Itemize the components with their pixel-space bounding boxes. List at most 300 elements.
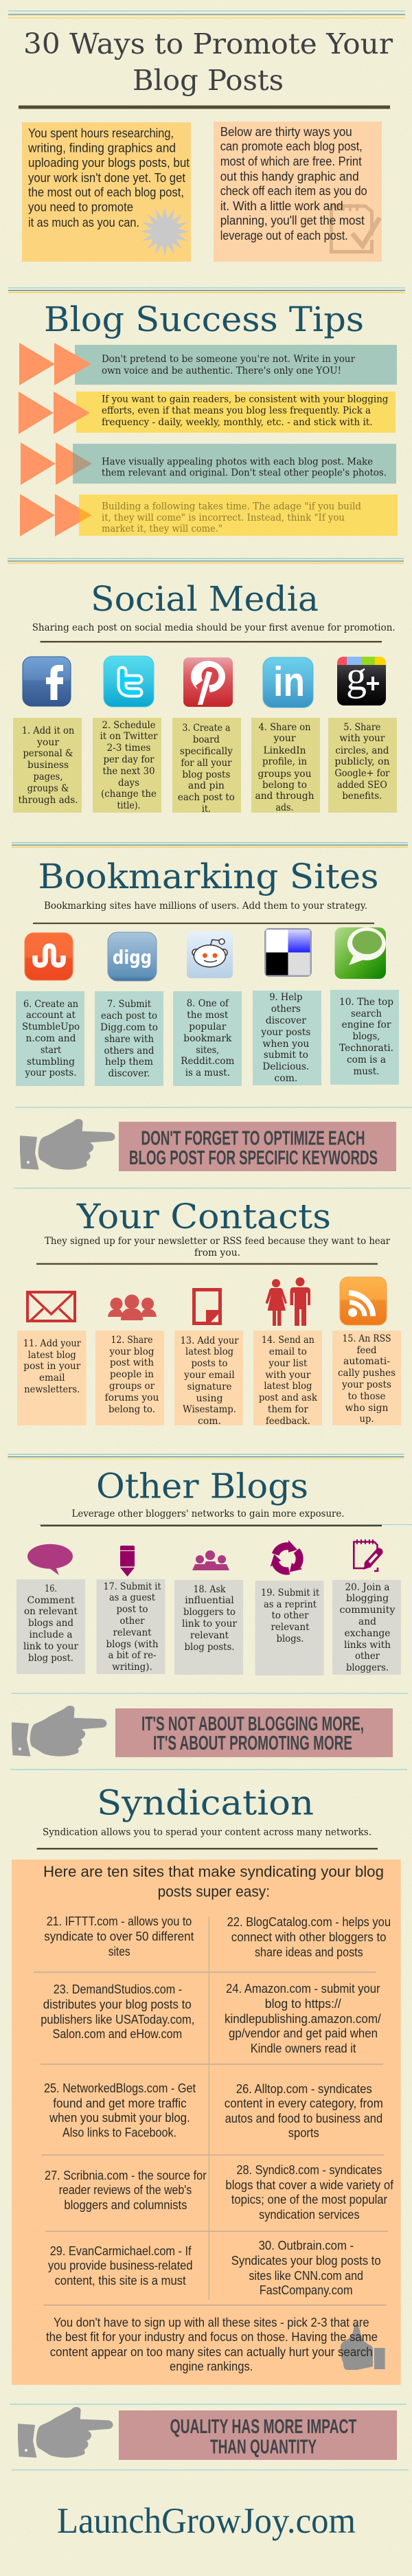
site 24 [225,1982,381,2055]
card: item 14: them for [268,1404,308,1415]
card: item 7: discover. [108,1068,150,1079]
card: item 7: others and [104,1046,154,1057]
icon: double arrow [19,392,90,434]
card: item 13: your email [183,1370,235,1381]
card: item 7: share with [104,1034,154,1045]
card: item 4: and through [255,791,314,802]
card: item 17: as a guest [109,1592,155,1603]
site 24: kindlepublishing.amazon.com/ [225,2012,381,2026]
panel heading: Here are ten sites that make syndicating your blog [43,1863,384,1880]
card: item 9: others [271,1004,301,1015]
card: item 1: business [27,760,69,771]
icon: linkedin [263,657,313,708]
site 28: topics; one of the most popular [231,2193,387,2206]
card: item 7: each post to [101,1010,157,1021]
site 22: connect with other bloggers to [231,1930,387,1944]
card: item 13: latest blog [185,1346,233,1357]
card: item 8: the most [187,1010,229,1021]
card: item 13: using [196,1393,223,1404]
site 24: Kindle owners read it [251,2042,356,2055]
site 23: distributes your blog posts to [43,1998,192,2011]
card: item 17: blogs (with [106,1639,158,1650]
site 24: gp/vendor and get paid when [229,2026,378,2040]
card: item 2: per day for [103,754,154,765]
card: item 2: title). [117,800,140,811]
card: item 12: belong to. [108,1404,155,1415]
card: item 2: 2-3 times [107,743,151,754]
panel: intro left [22,122,191,262]
card: item 7: 7. Submit [107,999,151,1010]
panel: tip 2: efforts, even if that means you blog less frequently. Pick a [102,405,371,416]
panel: intro left: your work isn't done yet. To get [28,171,185,185]
site 30: sites like CNN.com and [249,2269,363,2283]
site 29: you provide business-related [48,2259,192,2272]
panel: tip 1: own voice and be authentic. There's only one YOU! [102,365,341,376]
card: item 15 [332,1331,401,1425]
banner: quality over quantity: THAN QUANTITY [210,2437,317,2459]
site 23: 23. DemandStudios.com - [54,1982,182,1996]
card: item 11: email [39,1372,65,1383]
card: item 17: other [119,1616,145,1627]
icon: thumbs up [341,2324,385,2370]
site 29: content, this site is a must [55,2274,186,2287]
icon: speech bubble [27,1544,73,1575]
card: item 2: 2. Schedule [102,720,155,731]
panel: intro right: Below are thirty ways you [220,125,352,139]
card: item 14: your list [268,1358,308,1369]
card: item 4: belong to [262,780,307,791]
card: item 20: links with [344,1640,391,1651]
site 21: sites [108,1945,130,1958]
card: item 13: signature [187,1381,232,1392]
card: item 2: days [118,778,139,789]
site 25: Also links to Facebook. [62,2126,176,2140]
card: item 16: on relevant [24,1606,78,1617]
card: item 16: include a [29,1629,73,1640]
panel: intro left: the most out of each blog post, [28,185,184,199]
subtitle: social media: Sharing each post on social media should be your first avenue for promotion. [32,622,396,633]
card: item 15: automati- [343,1356,390,1367]
site 25: 25. NetworkedBlogs.com - Get [44,2081,196,2095]
panel: intro left: uploading your blogs posts, but [28,156,190,170]
icon: notepad check [331,204,380,251]
closing note: You don't have to sign up with all these sites - pick 2-3 that are [54,2316,369,2329]
icon: note and pencil [354,1539,379,1571]
heading: Your Contacts: Your Contacts [76,1197,331,1236]
card: item 6: account at [26,1010,76,1021]
card: item 3: and pin [188,780,225,791]
card: item 15: feed [357,1345,377,1356]
site 30: 30. Outbrain.com - [259,2239,354,2252]
panel: tip 4: it, they will come" is incorrect. Instead, think "If you [102,512,345,523]
card: item 3: board [193,734,220,745]
card: item 14: with your [265,1370,311,1381]
card: item 9: 9. Help [269,992,302,1003]
card: item 19: to other [272,1610,309,1621]
card: item 4: 4. Share on [258,722,310,733]
card: item 16: blogs and [28,1618,73,1629]
site 26: sports [288,2126,319,2140]
footer brand: LaunchGrowJoy.com [57,2501,356,2541]
card: item 6: n.com and [26,1033,76,1044]
card: item 1: through ads. [18,795,78,806]
site 22: share ideas and posts [255,1945,363,1959]
card: item 4: groups you [258,769,312,780]
subtitle: other blogs: Leverage other bloggers' networks to gain more exposure. [71,1509,345,1519]
heading: Bookmarking Sites: Bookmarking Sites [38,857,379,896]
card: item 19: as a reprint [264,1599,317,1610]
icon: group purple [192,1550,229,1570]
card: item 7: help them [105,1057,153,1067]
card: item 8 [173,991,242,1086]
site 22 [227,1915,391,1959]
card: item 19: blogs. [276,1634,304,1645]
panel: tip 1 [19,343,397,385]
card: item 13: Wisestamp. [183,1404,236,1415]
title [23,27,393,97]
card: item 14: post and ask [259,1392,317,1403]
card: item 9: submit to [264,1050,308,1061]
panel: syndication sites [12,1860,401,2385]
icon: document [194,1290,220,1323]
icon: double arrow [20,494,92,536]
panel: tip 3 [21,442,396,485]
card: item 19: 19. Submit it [261,1588,319,1598]
card: item 13: posts to [191,1358,228,1369]
card: item 4 [251,718,320,813]
card: item 12: people in [110,1369,154,1380]
card: item 6 [16,991,84,1086]
card: item 10: Technorati. [339,1043,393,1054]
site 27: 27. Scribnia.com - the source for [45,2169,207,2182]
card: item 14 [253,1331,322,1427]
card: item 11: newsletters. [24,1384,80,1395]
icon: digg [108,932,157,981]
card: item 3 [172,718,241,815]
card: item 7 [95,991,163,1086]
card: item 15: to those [347,1391,386,1402]
card: item 1: groups & [27,783,69,794]
card: item 2: (change the [101,789,157,800]
card: item 5: Google+ for [334,768,390,779]
icon: google plus: g [346,653,367,699]
icon: pinterest [183,657,233,707]
banner: quality over quantity [119,2410,397,2460]
site 27: bloggers and columnists [64,2198,187,2212]
card: item 17: writing). [112,1662,152,1673]
title: 30 Ways to Promote Your [23,27,393,60]
card: item 8: Reddit.com [181,1056,234,1067]
icon: linkedin: in [273,659,305,705]
card: item 11: latest blog [28,1350,76,1361]
site 26 [225,2082,383,2140]
card: item 10: com is a [347,1054,386,1065]
panel: intro left: writing, finding graphics and [27,142,176,155]
card: item 3: specifically [180,746,233,757]
site 25 [44,2081,196,2140]
panel: intro right: most of which are free. Print [220,155,362,168]
panel: tip 3: them relevant and original. Don't steal other people's photos. [102,468,387,479]
heading: Social Media: Social Media [91,579,319,619]
card: item 12: post with [110,1357,154,1368]
card: item 6: stumbling [27,1057,75,1067]
card: item 1: personal & [23,748,73,759]
card: item 3: 3. Create a [182,723,230,734]
icon: double arrow [21,442,92,485]
panel: tip 1: Don't pretend to be someone you're not. Write in your [102,354,355,365]
card: item 14: feedback. [266,1416,310,1427]
site 21: syndicate to over 50 different [44,1930,194,1943]
card: item 9: Delicious. [262,1061,309,1072]
card: item 14: email to [269,1346,307,1357]
site 28 [225,2163,394,2222]
card: item 10: must. [353,1066,379,1077]
card: item 17: 17. Submit it [103,1581,161,1592]
closing note: content appear on too many sites can actually hurt your search [50,2345,373,2359]
card: item 20: blogging [346,1593,389,1604]
card: item 4: LinkedIn [264,745,306,756]
card: item 10: 10. The top [339,997,393,1008]
card: item 12: forums you [104,1392,159,1403]
card: item 5: added SEO [337,780,387,791]
site 28: syndication services [259,2208,360,2222]
heading: Syndication: Syndication [97,1783,314,1823]
card: item 3: for all your [181,758,232,769]
panel: intro left: you need to promote [28,201,133,214]
card: item 7: Digg.com to [100,1022,158,1033]
site 30: Syndicates your blog posts to [231,2254,381,2268]
heading: Other Blogs: Other Blogs [96,1467,308,1506]
card: item 4: profile, in [262,756,307,767]
card: item 9: when you [262,1039,309,1050]
icon: group [108,1294,157,1320]
card: item 19: relevant [271,1622,310,1633]
card: item 6: your posts. [25,1067,77,1078]
card: item 1 [13,718,82,813]
panel heading: posts super easy: [158,1883,270,1900]
site 23: Salon.com and eHow.com [52,2027,182,2041]
banner: optimize keywords [119,1122,396,1171]
card: item 17: relevant [113,1627,152,1638]
panel heading [43,1863,384,1900]
card: item 5: benefits. [342,791,382,802]
card: item 20 [332,1580,401,1675]
icon: delicious [264,928,312,977]
site 25: found and get more traffic [53,2097,187,2110]
panel: tip 2: frequency - daily, weekly, monthly, etc. - and stick with it. [102,417,373,428]
site 24: 24. Amazon.com - submit your [226,1982,380,1996]
card: item 8: is a must. [185,1067,230,1078]
card: item 13 [174,1331,243,1427]
panel: tip 2 [19,392,396,434]
card: item 2 [93,718,161,813]
card: item 20: exchange [345,1628,390,1639]
card: item 15: who sign [345,1403,389,1414]
subtitle: contacts: from you. [194,1247,240,1258]
subtitle: contacts [45,1236,390,1258]
card: item 11: post in your [23,1361,81,1372]
card: item 9: discover [266,1015,306,1026]
subtitle: bookmarking: Bookmarking sites have millions of users. Add them to your strategy. [44,901,367,912]
icon: google plus [337,653,386,705]
card: item 20: bloggers. [346,1662,389,1673]
icon: twitter [104,656,154,707]
icon: pointing hand 2 [12,1706,107,1756]
site 30 [231,2239,381,2297]
card: item 8: popular [189,1021,227,1032]
icon: technorati [335,927,386,979]
banner: promoting more [115,1708,393,1757]
card: item 9: your posts [260,1027,310,1038]
site 26: 26. Alltop.com - syndicates [236,2082,372,2096]
site 22: 22. BlogCatalog.com - helps you [227,1915,391,1929]
card: item 5 [328,718,397,813]
site 27: reader reviews of the web's [59,2183,192,2197]
card: item 20: and [358,1616,376,1627]
card: item 11: 11. Add your [23,1338,81,1349]
panel: tip 4: Building a following takes time. The adage "if you build [102,501,361,512]
card: item 13: com. [198,1416,221,1427]
icon: facebook [23,657,71,706]
card: item 16: 16. [45,1583,57,1594]
card: item 1: your [36,737,59,748]
card: item 20: community [339,1605,396,1616]
card: item 6: StumbleUpo [22,1021,80,1032]
top triple rule [8,10,405,19]
card: item 1: pages, [33,771,63,782]
icon: stumbleupon [25,933,73,980]
icon: starburst [140,207,190,256]
card: item 4: your [273,733,296,744]
card: item 5: publicly, on [334,756,389,767]
icon: pointing hand 1 [20,1119,115,1170]
icon: recycle [266,1540,309,1578]
title: Blog Posts [133,64,284,97]
card: item 15: 15. An RSS [342,1333,391,1344]
heading: Blog Success Tips: Blog Success Tips [44,300,364,339]
icon: pointing hand 3 [18,2407,113,2458]
card: item 8: 8. One of [187,998,230,1009]
card: item 6: start [41,1045,61,1056]
card: item 18: link to your [182,1618,237,1629]
panel: tip 4: market it, they will come." [102,523,222,534]
panel: tip 2: If you want to gain readers, be consistent with your blogging [102,394,389,405]
card: item 10: engine for [342,1019,391,1030]
icon: rss [340,1277,387,1325]
card: item 9: com. [274,1073,297,1084]
site 29 [48,2244,192,2287]
closing note [46,2316,378,2373]
card: item 1: 1. Add it on [22,725,74,736]
card: item 8: bookmark [183,1033,232,1044]
card: item 3: each post to [178,792,235,803]
card: item 18: 18. Ask [194,1584,226,1595]
card: item 15: your posts [341,1379,391,1390]
card: item 5: circles, and [335,745,389,756]
card: item 20: other [355,1651,380,1662]
card: item 11 [17,1331,87,1425]
card: item 15: cally pushes [338,1368,396,1379]
panel: intro left: You spent hours researching, [28,126,174,140]
card: item 12 [95,1331,164,1425]
card: item 17: a bit of re- [108,1650,157,1661]
card: item 3: blog posts [182,769,230,780]
panel: tip 4 [20,494,398,536]
site 21: 21. IFTTT.com - allows you to [47,1914,192,1928]
card: item 18: bloggers to [183,1607,236,1618]
card: item 10: search [351,1008,382,1019]
card: item 17 [96,1579,165,1674]
site 23: publishers like USAToday.com, [41,2013,194,2026]
subtitle: contacts: They signed up for your newsletter or RSS feed because they want to hear [45,1236,390,1247]
panel: intro right: out this handy graphic and [220,170,359,183]
icon: digg: digg [113,946,152,969]
card: item 10 [330,990,399,1085]
icon: envelope [27,1292,75,1321]
card: item 18: relevant [190,1630,229,1641]
card: item 6: 6. Create an [23,999,78,1010]
subtitle: syndication: Syndication allows you to sperad your content across many networks. [43,1827,371,1838]
card: item 16: link to your [23,1641,78,1652]
site 28: blogs that cover a wide variety of [225,2178,394,2192]
card: item 18 [174,1580,243,1675]
closing note: the best fit for your industry and focus on those. Having the same [46,2330,378,2344]
closing note: engine rankings. [170,2360,253,2373]
panel: intro right: planning, you'll get the most [220,214,365,227]
card: item 2: the next 30 [103,766,155,777]
site 25: when you submit your blog. [49,2111,190,2125]
card: item 16 [16,1579,85,1674]
card: item 13: 13. Add your [180,1335,239,1346]
icon: people [265,1278,310,1326]
icon: pencil [120,1546,135,1577]
site 29: 29. EvanCarmichael.com - If [50,2244,192,2258]
card: item 2: it on Twitter [100,731,158,742]
card: item 12: 12. Share [111,1335,152,1346]
panel: intro right: it. With a little work and [220,199,343,213]
site 30: FastCompany.com [260,2283,353,2297]
card: item 5: 5. Share [343,722,380,733]
panel: intro right [214,122,382,262]
icon: double arrow [19,343,91,385]
card: item 9 [253,991,321,1085]
card: item 16: Comment [27,1595,75,1606]
site 24: blog to https:// [265,1997,341,2011]
card: item 14: latest blog [264,1381,312,1392]
site 27 [45,2169,207,2212]
card: item 15: up. [360,1414,374,1425]
card: item 3: it. [202,804,211,815]
card: item 20: 20. Join a [345,1582,390,1593]
site 26: content in every category, from [225,2097,383,2110]
card: item 16: blog post. [28,1653,73,1664]
site 23 [41,1982,194,2041]
card: item 17: post to [117,1604,148,1615]
card: item 19 [255,1581,324,1675]
panel: intro right: leverage out of each post. [220,229,348,242]
card: item 5: with your [339,733,385,744]
card: item 18: influential [185,1595,234,1606]
card: item 10: blogs, [353,1031,380,1042]
site 26: autos and food to business and [225,2112,382,2125]
card: item 18: blog posts. [184,1642,235,1653]
icon: reddit [187,931,233,978]
panel: tip 3: Have visually appealing photos with each blog post. Make [102,457,373,468]
panel: intro right: check off each item as you do [220,184,367,198]
card: item 12: groups or [109,1381,154,1392]
card: item 8: sites, [196,1045,219,1056]
card: item 14: 14. Send an [262,1335,314,1346]
